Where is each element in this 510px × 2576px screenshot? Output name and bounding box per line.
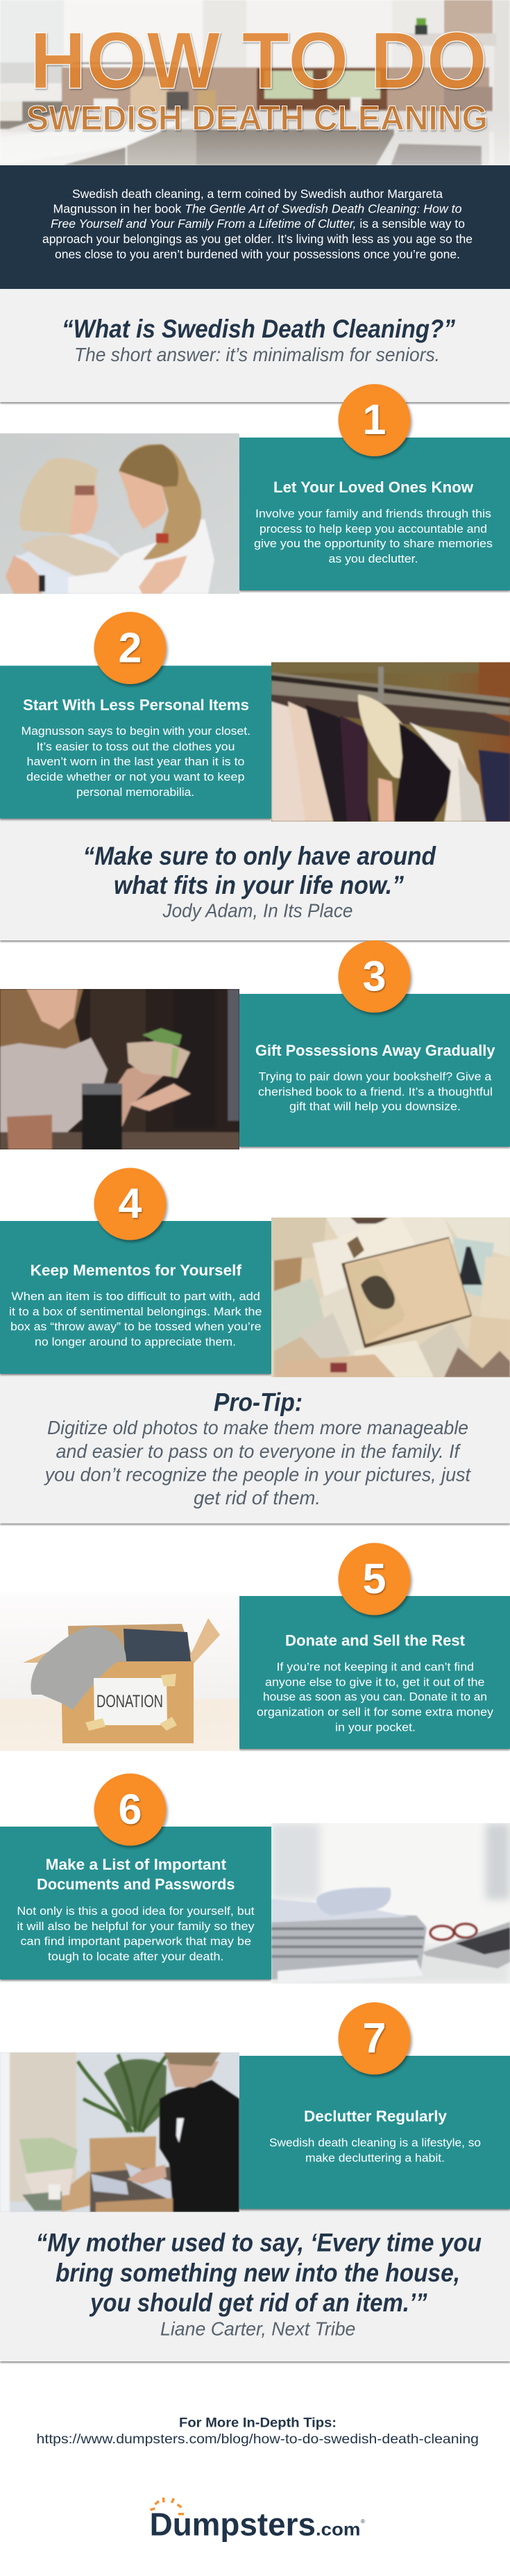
- step title: Make a List of Important: [46, 1856, 226, 1873]
- step title: Let Your Loved Ones Know: [273, 479, 473, 496]
- intro paragraph: Magnusson in her book The Gentle Art of Swedish Death Cleaning: How to: [53, 201, 462, 215]
- step 1 panel: [0, 384, 510, 594]
- step body: [21, 724, 250, 799]
- pro-tip text: [44, 1417, 471, 1509]
- step body: [269, 2136, 481, 2164]
- step title: Start With Less Personal Items: [23, 696, 249, 714]
- logo wordmark: Dumpsters: [150, 2506, 316, 2542]
- title: SWEDISH DEATH CLEANING: SWEDISH DEATH CLEANING: [26, 99, 488, 138]
- teal card: [0, 665, 271, 818]
- attribution: Liane Carter, Next Tribe: [160, 2318, 355, 2339]
- step body: If you’re not keeping it and can’t find: [276, 1660, 474, 1674]
- number badge 1: [339, 384, 411, 456]
- logo: Dumpsters.com: [150, 2498, 365, 2542]
- panel: what is Swedish death cleaning: [0, 289, 510, 402]
- teal card: [0, 1221, 271, 1374]
- number badge 6: [94, 1774, 167, 1846]
- number badge 6: 6: [119, 1786, 142, 1833]
- step body: [257, 1660, 494, 1734]
- step body: it to a box of sentimental belongings. Mark the: [9, 1305, 262, 1318]
- number badge 5: [339, 1543, 411, 1615]
- step 7 panel: [0, 2002, 510, 2212]
- title: HOW TO DO: HOW TO DO: [30, 15, 487, 106]
- pro-tip text: get rid of them.: [194, 1487, 321, 1509]
- number badge 2: 2: [119, 624, 142, 671]
- photo: donation box: DONATION: [96, 1692, 163, 1711]
- number badge 4: [94, 1168, 167, 1240]
- number badge 1: 1: [363, 396, 386, 443]
- step body: personal memorabilia.: [76, 786, 194, 799]
- quote text: [83, 842, 436, 899]
- step body: It’s easier to toss out the clothes you: [36, 740, 235, 753]
- step body: Magnusson says to begin with your closet.: [21, 724, 250, 738]
- number badge 4: 4: [119, 1179, 142, 1227]
- step body: house as soon as you can. Donate it to an: [263, 1690, 487, 1703]
- pro-tip text: and easier to pass on to everyone in the family. If: [56, 1440, 461, 1462]
- heading: “What is Swedish Death Cleaning?”: [62, 315, 455, 343]
- step body: Trying to pair down your bookshelf? Give a: [259, 1070, 492, 1083]
- photo: woman packing a box: [0, 2052, 239, 2212]
- panel: intro band: [0, 165, 510, 289]
- step body: When an item is too difficult to part with, add: [11, 1290, 260, 1303]
- teal card: [239, 2056, 510, 2209]
- photo: mother and daughter: [0, 433, 239, 594]
- step body: make decluttering a habit.: [305, 2152, 445, 2164]
- quote text: what fits in your life now.”: [114, 871, 404, 899]
- step body: organization or sell it for some extra money: [257, 1706, 494, 1718]
- step title: Keep Mementos for Yourself: [31, 1262, 242, 1279]
- intro paragraph: Free Yourself and Your Family From a Lifetime of Clutter, is a sensible way to: [51, 217, 465, 231]
- step body: Not only is this a good idea for yourself, but: [17, 1904, 255, 1918]
- logo: Dumpsters.com: .com: [316, 2518, 361, 2539]
- step title: Donate and Sell the Rest: [285, 1632, 465, 1649]
- teal card: [239, 438, 510, 590]
- step body: [254, 507, 493, 565]
- pro-tip heading: Pro-Tip:: [214, 1388, 303, 1417]
- subheading: The short answer: it’s minimalism for seniors.: [74, 344, 440, 365]
- photo: donation box: [0, 1592, 239, 1751]
- quote text: [36, 2228, 482, 2317]
- step body: tough to locate after your death.: [48, 1950, 223, 1963]
- step body: no longer around to appreciate them.: [35, 1335, 236, 1349]
- intro paragraph: Swedish death cleaning, a term coined by Swedish author Margareta: [72, 187, 443, 201]
- step body: give you the opportunity to share memories: [254, 537, 493, 550]
- intro paragraph: [42, 187, 473, 261]
- logo: Dumpsters.com: ®: [361, 2518, 365, 2525]
- step body: cherished book to a friend. It’s a thoughtful: [258, 1085, 493, 1099]
- step body: [9, 1290, 262, 1349]
- step body: process to help keep you accountable and: [260, 522, 487, 535]
- step 3 panel: [0, 940, 510, 1149]
- step 4 panel: [0, 1168, 510, 1377]
- step 5 panel: [0, 1543, 510, 1751]
- more tips heading: For More In-Depth Tips:: [179, 2416, 337, 2431]
- panel: pro-tip: [0, 1374, 510, 1524]
- step 6 panel: [0, 1774, 510, 1984]
- teal card: [239, 1596, 510, 1749]
- step title: Gift Possessions Away Gradually: [255, 1042, 495, 1059]
- panel: quote Liane Carter: [0, 2209, 510, 2361]
- panel: header kitchen photo with title: [0, 0, 510, 165]
- link: https://www.dumpsters.com/blog/how-to-do-swedish-death-cleaning: [36, 2432, 479, 2447]
- step title: Declutter Regularly: [304, 2107, 447, 2125]
- step title: Documents and Passwords: [37, 1875, 235, 1893]
- intro paragraph: ones close to you aren’t burdened with your possessions once you’re gone.: [55, 247, 460, 261]
- step body: as you declutter.: [329, 552, 418, 565]
- teal card: [239, 994, 510, 1147]
- quote text: “Make sure to only have around: [83, 842, 436, 870]
- pro-tip text: Digitize old photos to make them more manageable: [47, 1417, 468, 1438]
- step body: anyone else to give it to, get it out of the: [265, 1675, 484, 1689]
- step body: box as “throw away” to be tossed when you’re: [10, 1320, 261, 1333]
- step body: in your pocket.: [335, 1721, 416, 1734]
- photo: clothes on rack: [271, 662, 510, 822]
- photo: kitchen: [0, 0, 510, 165]
- step body: can find important paperwork that may be: [21, 1935, 251, 1947]
- step 2 panel: [0, 612, 510, 822]
- photo: old letters and book: [271, 1215, 510, 1377]
- logo rays: [150, 2498, 184, 2516]
- step body: [17, 1904, 255, 1963]
- number badge 7: [339, 2002, 411, 2075]
- teal card: [0, 1827, 271, 1979]
- step body: gift that will help you downsize.: [289, 1100, 461, 1113]
- panel: quote Jody Adam: [0, 819, 510, 940]
- step body: Involve your family and friends through this: [255, 507, 491, 520]
- step body: decide whether or not you want to keep: [26, 770, 244, 783]
- number badge 3: [339, 940, 411, 1013]
- step title: [37, 1856, 235, 1893]
- quote text: bring something new into the house,: [56, 2259, 460, 2287]
- photo: stack of documents and laptop: [271, 1823, 510, 1984]
- attribution: Jody Adam, In Its Place: [162, 900, 353, 921]
- quote text: you should get rid of an item.’”: [89, 2288, 427, 2317]
- intro paragraph: approach your belongings as you get older. It’s living with less as you age so the: [42, 232, 473, 246]
- number badge 3: 3: [363, 953, 386, 1000]
- step body: haven’t worn in the last year than it is to: [26, 755, 244, 768]
- step body: it will also be helpful for your family so they: [17, 1920, 255, 1933]
- band background: [0, 165, 510, 289]
- step body: [258, 1070, 493, 1113]
- number badge 5: 5: [363, 1555, 386, 1602]
- step body: Swedish death cleaning is a lifestyle, so: [269, 2136, 481, 2149]
- pro-tip text: you don’t recognize the people in your pictures, just: [44, 1464, 471, 1485]
- number badge 7: 7: [363, 2014, 386, 2061]
- photo: woman holding gift: [0, 989, 239, 1149]
- number badge 2: [94, 612, 167, 684]
